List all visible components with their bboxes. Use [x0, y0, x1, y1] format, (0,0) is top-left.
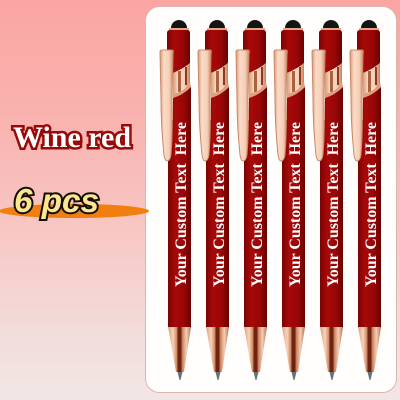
pen 3: Your Custom Text Here [249, 122, 266, 287]
pen 6 [350, 20, 381, 380]
panel: white pen card [146, 6, 396, 392]
pen 1 [160, 20, 191, 380]
pen 2: Your Custom Text Here [211, 122, 228, 287]
callout: quantity: 6 pcs [14, 182, 99, 219]
pen 3 [236, 20, 267, 380]
pen 4 [274, 20, 305, 380]
pen 2 [198, 20, 229, 380]
pen 5 [312, 20, 343, 380]
pen 5: Your Custom Text Here [325, 122, 342, 287]
pen 4: Your Custom Text Here [287, 122, 304, 287]
callout: quantity [0, 182, 149, 219]
orange brush stroke [0, 204, 149, 218]
pen 1: Your Custom Text Here [173, 122, 190, 287]
pen 6: Your Custom Text Here [363, 122, 380, 287]
heading: colour name: Wine red [13, 121, 131, 154]
